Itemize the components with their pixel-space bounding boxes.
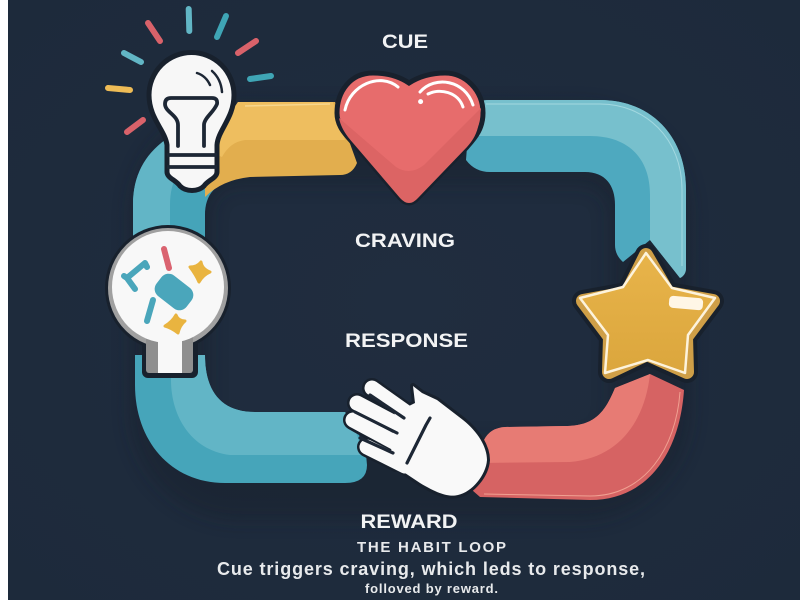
- palm: [390, 386, 487, 496]
- icon: star: [580, 253, 715, 373]
- description line 2: folloved by reward.: [365, 581, 498, 596]
- sparkle 2: [165, 315, 185, 333]
- glints: [197, 71, 222, 92]
- icon: tools in round badge: [105, 225, 231, 378]
- hammer handle: [147, 300, 153, 321]
- description line 1: Cue triggers craving, which leds to response,: [217, 559, 645, 579]
- hand outline: [353, 388, 407, 462]
- bulb body: [149, 53, 234, 190]
- icon: light bulb with rays: [108, 9, 271, 190]
- hammer head: [151, 270, 197, 314]
- red bar: [164, 249, 169, 268]
- title: THE HABIT LOOP: [357, 539, 506, 556]
- filament: [165, 98, 217, 146]
- arrow: red segment: [472, 374, 684, 500]
- arrow: teal bottom-left segment: [135, 355, 367, 483]
- label: craving: CRAVING: [355, 231, 455, 252]
- arrow: teal top-right segment: [466, 100, 686, 278]
- fingers: [353, 388, 410, 466]
- base lines: [167, 155, 217, 167]
- sparkle 1: [190, 262, 210, 282]
- arrow: yellow segment: [205, 102, 357, 197]
- label: cue: CUE: [382, 32, 428, 53]
- label: response: RESPONSE: [345, 331, 468, 352]
- teal bone: [124, 263, 147, 289]
- rays: [108, 9, 271, 132]
- arrow: teal top-left segment: [133, 140, 240, 245]
- icon: heart: [337, 73, 483, 203]
- finger and palm lines: [355, 395, 430, 463]
- icon: hand: [353, 386, 487, 496]
- label: reward: REWARD: [360, 512, 458, 533]
